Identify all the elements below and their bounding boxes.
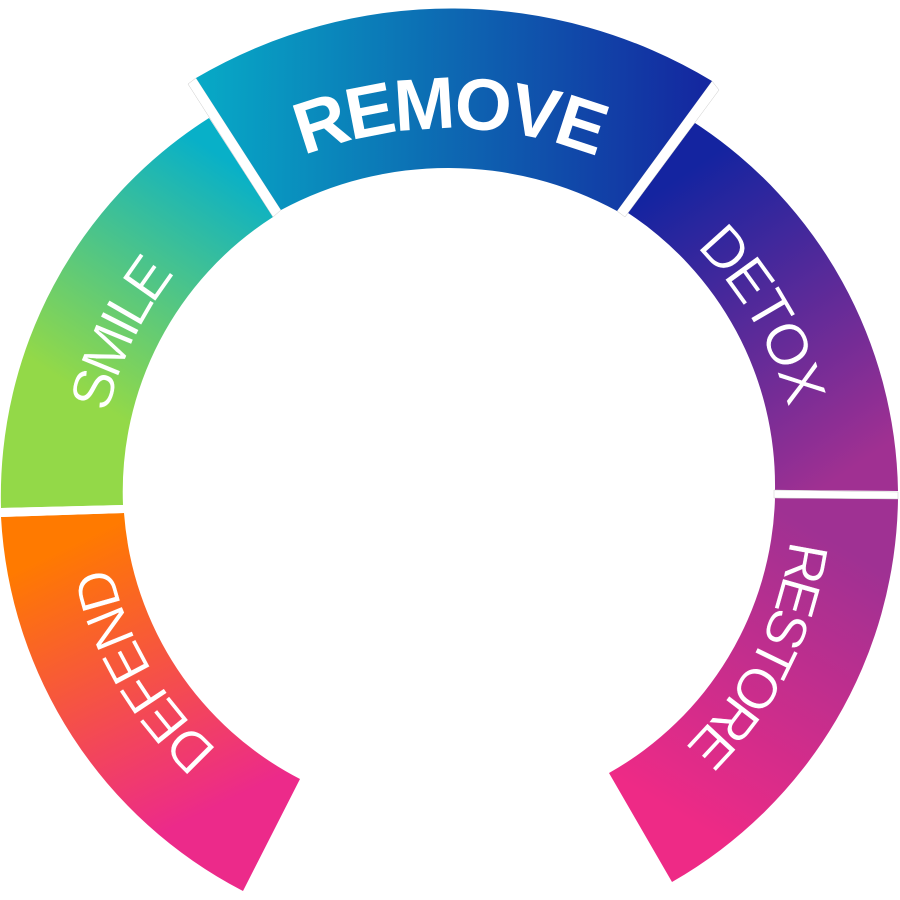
label: remove: REMOVE: [292, 77, 609, 156]
label: defend: DEFEND: [78, 573, 214, 774]
segment: defend: [1, 513, 300, 891]
segment: remove: [196, 8, 712, 211]
label: smile: SMILE: [72, 254, 173, 408]
label: restore: RESTORE: [687, 544, 828, 771]
segment: smile: [0, 118, 273, 508]
segment: detox: [628, 123, 898, 491]
white divider strips: [1, 78, 898, 517]
segment: restore: [609, 498, 898, 882]
label: detox: DETOX: [700, 224, 826, 406]
